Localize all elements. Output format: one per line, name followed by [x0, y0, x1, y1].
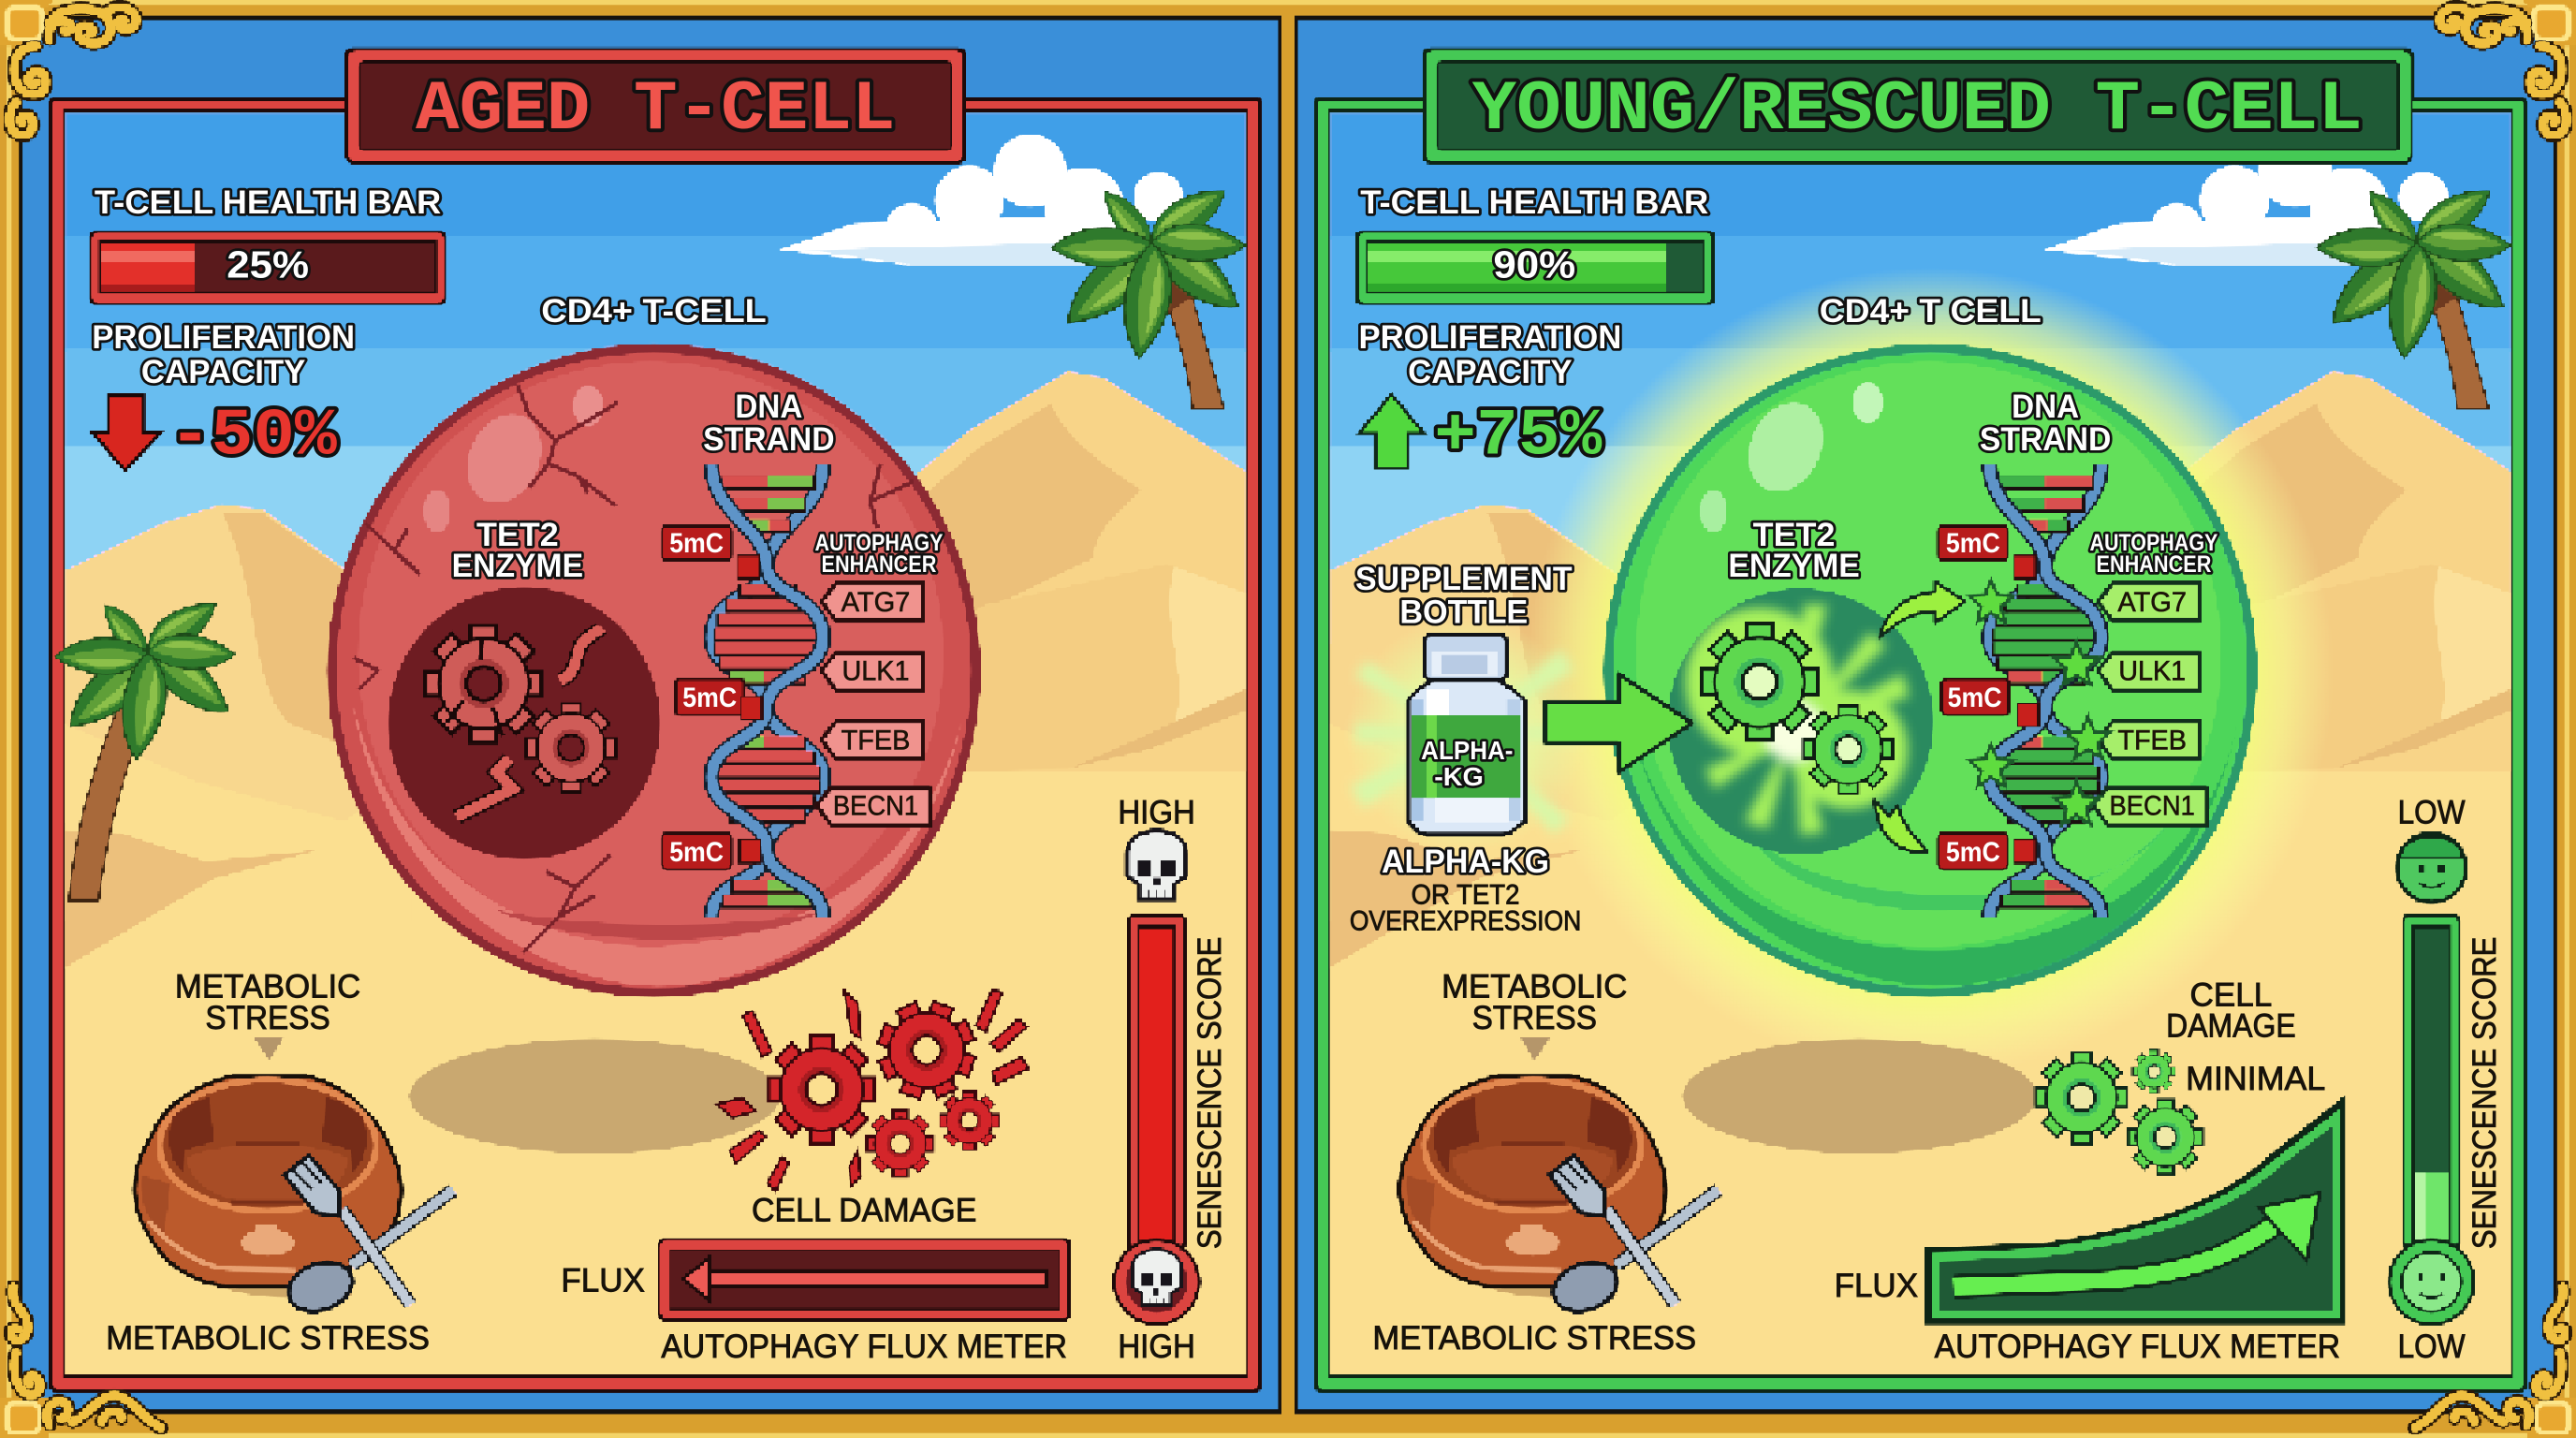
young panel labels — [1350, 69, 2503, 1365]
metabolic stress top label: STRESS — [1472, 1000, 1597, 1036]
5mC labels — [669, 528, 737, 868]
gene names — [2110, 587, 2195, 822]
low labels — [2398, 794, 2466, 1365]
icon: broken gears — [426, 625, 615, 792]
proliferation label: PROLIFERATION — [92, 319, 355, 356]
proliferation label — [1358, 319, 1621, 390]
senescence thermometer — [1112, 914, 1201, 1327]
DNA label — [1980, 389, 2111, 458]
gene tags — [816, 583, 929, 825]
supplement bottle label: SUPPLEMENT — [1355, 561, 1573, 597]
proliferation label: CAPACITY — [141, 354, 305, 390]
DNA label — [703, 389, 835, 458]
high labels: HIGH — [1118, 794, 1195, 830]
gene names: BECN1 — [2110, 791, 2195, 822]
metabolic stress caption: METABOLIC STRESS — [1372, 1320, 1696, 1357]
metabolic stress pointer — [253, 1037, 285, 1062]
cell label: CD4+ T CELL — [1820, 293, 2042, 330]
nucleus — [388, 587, 661, 859]
arrow to enzyme — [1546, 674, 1692, 772]
cell label: CD4+ T-CELL — [541, 293, 767, 330]
minimal label: MINIMAL — [2186, 1061, 2325, 1097]
TET2 label: ENZYME — [1728, 548, 1860, 584]
panel frame: red — [50, 97, 1262, 1392]
palm tree: lower left — [55, 591, 240, 901]
palm tree: upper right — [2317, 177, 2516, 409]
senescence score label: SENESCENCE SCORE — [1192, 937, 1228, 1249]
high labels — [1118, 794, 1195, 1365]
metabolic stress pointer — [1519, 1037, 1551, 1062]
health value: 25% — [227, 243, 309, 286]
icon: healthy gears — [2036, 1050, 2203, 1175]
5mC labels: 5mC — [1946, 837, 2000, 868]
gene names: ATG7 — [2117, 587, 2187, 618]
title plate — [1423, 48, 2413, 165]
methylation tags — [662, 526, 762, 870]
icon: skull — [1127, 830, 1186, 899]
5mC labels: 5mC — [669, 837, 724, 868]
desert background scene — [63, 111, 1249, 1377]
cell damage label — [2166, 976, 2296, 1045]
senescence score label: SENESCENCE SCORE — [2466, 937, 2503, 1249]
autophagy enhancer label: ENHANCER — [2097, 552, 2212, 578]
DNA label: STRAND — [703, 421, 835, 458]
TET2 label: TET2 — [1753, 517, 1835, 553]
autophagy enhancer label — [815, 531, 943, 578]
autophagy enhancer label: AUTOPHAGY — [815, 531, 943, 556]
gene names: ATG7 — [842, 587, 910, 618]
DNA label: STRAND — [1980, 421, 2111, 458]
health bar label: T-CELL HEALTH BAR — [1360, 184, 1708, 221]
bottle label text: -KG — [1434, 762, 1484, 791]
shadow — [409, 1038, 781, 1153]
flux label: FLUX — [1835, 1268, 1918, 1304]
health bar — [1355, 230, 1715, 306]
metabolic stress top label — [175, 969, 360, 1036]
flux meter caption: AUTOPHAGY FLUX METER — [1935, 1328, 2340, 1365]
low labels: LOW — [2398, 794, 2466, 830]
cell glow — [1528, 268, 2333, 1073]
5mC labels — [1946, 528, 2002, 868]
5mC labels: 5mC — [1946, 528, 2000, 559]
gene names — [833, 587, 918, 822]
cloud — [781, 135, 1183, 266]
icon: healthy face — [2397, 833, 2466, 902]
alpha-KG caption: ALPHA-KG — [1382, 844, 1549, 880]
gene names: ULK1 — [842, 656, 909, 687]
supplement bottle glow — [1347, 616, 1584, 853]
alpha-KG caption: OR TET2 — [1412, 879, 1519, 910]
title: YOUNG/RESCUED T-CELL — [1472, 69, 2363, 150]
high labels: HIGH — [1118, 1328, 1195, 1365]
5mC labels: 5mC — [1948, 682, 2002, 713]
metabolic stress top label — [1442, 969, 1627, 1036]
enzyme fragments — [457, 628, 601, 816]
icon: active gears — [1702, 624, 1893, 794]
proliferation label — [92, 319, 355, 390]
cell damage label: DAMAGE — [2166, 1008, 2296, 1045]
gene names: BECN1 — [833, 791, 918, 822]
panel: aged T-cell — [50, 48, 1262, 1392]
cell damage label: CELL — [2190, 976, 2272, 1013]
icon: empty bowl with fork and spoon — [1399, 1076, 1719, 1320]
metabolic stress top label: STRESS — [205, 1000, 330, 1036]
gene names: ULK1 — [2118, 656, 2186, 687]
health bar label: T-CELL HEALTH BAR — [95, 184, 441, 221]
DNA label: DNA — [2012, 389, 2079, 425]
gene names: TFEB — [842, 725, 910, 756]
metabolic stress caption: METABOLIC STRESS — [106, 1320, 430, 1357]
title plate — [345, 48, 966, 165]
proliferation label: CAPACITY — [1408, 354, 1573, 390]
cell damage caption: CELL DAMAGE — [752, 1192, 976, 1228]
alpha-KG caption: OVEREXPRESSION — [1350, 906, 1581, 937]
autophagy enhancer label: ENHANCER — [822, 552, 937, 578]
desert background scene — [1327, 111, 2513, 1377]
curved arrow up — [1880, 581, 1965, 638]
health bar — [89, 230, 446, 306]
nucleus with energy rays — [1667, 588, 1934, 855]
bottle label text: ALPHA- — [1421, 736, 1513, 765]
proliferation value: -50% — [169, 400, 338, 474]
icon: empty bowl with fork and spoon — [135, 1076, 453, 1320]
metabolic stress top label: METABOLIC — [1442, 969, 1627, 1005]
activation stars — [1969, 580, 2110, 824]
5mC labels: 5mC — [682, 682, 737, 713]
curved arrow down — [1875, 800, 1927, 852]
panel frame: green — [1314, 97, 2526, 1392]
flux label: FLUX — [561, 1263, 645, 1299]
DNA strand — [711, 463, 823, 917]
gene tags — [2093, 583, 2206, 825]
supplement bottle label: BOTTLE — [1399, 594, 1528, 630]
aged cell — [327, 344, 981, 998]
TET2 label: ENZYME — [452, 548, 583, 584]
TET2 label: TET2 — [476, 517, 559, 553]
young cell — [1603, 344, 2258, 998]
methylation tags — [1939, 526, 2039, 870]
low labels: LOW — [2398, 1328, 2466, 1365]
pixel art layer: aged T-cell — [50, 48, 1262, 1392]
gene names: TFEB — [2117, 725, 2187, 756]
alpha-KG caption — [1350, 844, 1581, 937]
TET2 label — [1728, 517, 1860, 584]
autophagy enhancer label — [2089, 531, 2217, 578]
icon: supplement bottle — [1408, 635, 1525, 835]
DNA label: DNA — [735, 389, 802, 425]
flux meter caption: AUTOPHAGY FLUX METER — [661, 1328, 1067, 1365]
shadow — [1682, 1038, 2037, 1153]
panel: young/rescued T-cell — [1314, 48, 2526, 1392]
autophagy enhancer label: AUTOPHAGY — [2089, 531, 2217, 556]
pixel art layer: young T-cell — [1314, 48, 2526, 1392]
flux meter — [657, 1238, 1071, 1321]
title: AGED T-CELL — [416, 69, 896, 150]
flux meter — [1928, 1101, 2343, 1321]
proliferation label: PROLIFERATION — [1358, 319, 1621, 356]
senescence thermometer — [2387, 914, 2476, 1327]
icon: damaged gears — [716, 989, 1029, 1192]
proliferation value: +75% — [1434, 400, 1603, 474]
TET2 label — [452, 517, 583, 584]
aged panel labels — [92, 69, 1228, 1365]
icon: down arrow — [92, 396, 161, 470]
icon: up arrow — [1358, 394, 1425, 468]
health value: 90% — [1493, 243, 1575, 286]
bottle label text — [1421, 736, 1513, 791]
5mC labels: 5mC — [669, 528, 724, 559]
DNA strand — [1989, 463, 2101, 917]
palm tree: upper right — [1052, 177, 1251, 409]
supplement bottle label — [1355, 561, 1573, 630]
metabolic stress top label: METABOLIC — [175, 969, 360, 1005]
cloud — [2045, 135, 2448, 266]
